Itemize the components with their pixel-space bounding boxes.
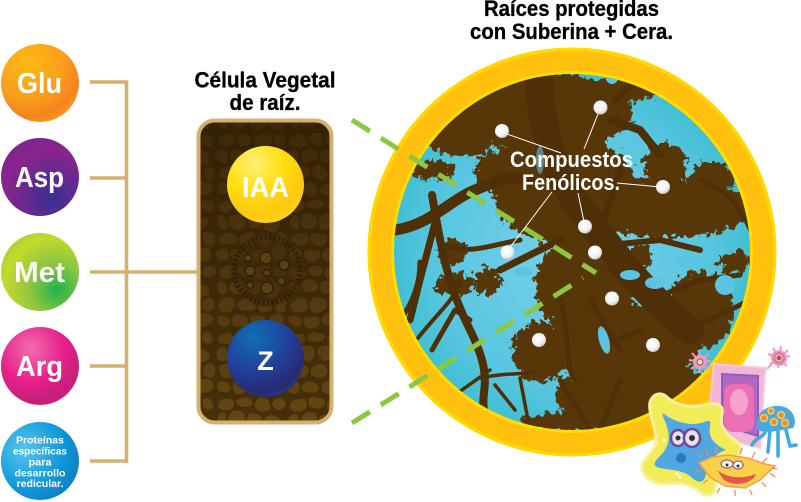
dashed zoom lines xyxy=(352,120,596,423)
bracket connector xyxy=(90,82,198,463)
hormone: Z xyxy=(227,320,304,397)
amino acid: Glu: Glu xyxy=(17,68,62,100)
microbe: jellyfish xyxy=(752,406,796,456)
microbe: orange fish xyxy=(695,447,777,496)
microbe: small pink eye right xyxy=(766,346,790,370)
hormone: IAA xyxy=(227,146,304,223)
amino acid: Asp: Asp xyxy=(15,162,64,194)
heading: plant cell: Célula Vegetal xyxy=(194,68,336,92)
amino acid: Arg: Arg xyxy=(16,351,63,383)
label: phenolic compounds: Compuestos xyxy=(510,147,633,172)
specific proteins circle: redicular. xyxy=(16,478,64,490)
amino acid: Glu xyxy=(1,44,79,122)
heading: protected roots xyxy=(470,0,673,44)
specific proteins circle: para xyxy=(28,456,52,468)
heading: plant cell: de raíz. xyxy=(230,90,300,115)
microbe: pink plant cell xyxy=(708,364,767,448)
label: phenolic compounds xyxy=(510,147,633,195)
specific proteins circle: específicas xyxy=(13,446,67,458)
heading: plant cell xyxy=(194,68,336,115)
specific proteins circle: desarrollo xyxy=(14,468,66,480)
specific proteins circle xyxy=(1,422,79,500)
microbes illustration xyxy=(642,346,796,496)
heading: protected roots: con Suberina + Cera. xyxy=(470,19,673,44)
panel: magnified root circle xyxy=(368,48,776,456)
panel: plant root cell xyxy=(196,118,334,424)
amino acid: Asp xyxy=(1,138,79,216)
amino acid: Arg xyxy=(1,327,79,405)
amino acid: Met: Met xyxy=(14,257,65,289)
hormone: Z: Z xyxy=(257,346,274,376)
amino acid: Met xyxy=(1,233,79,311)
root network xyxy=(395,66,753,432)
leader lines xyxy=(507,114,660,250)
phenolic compound markers xyxy=(495,100,670,352)
microbe: yellow blue amoeba xyxy=(642,394,741,495)
label: phenolic compounds: Fenólicos. xyxy=(522,170,620,195)
hormone: IAA: IAA xyxy=(242,172,289,204)
microbe: small pink eye left xyxy=(689,350,716,373)
specific proteins circle: Proteínas xyxy=(16,434,64,446)
